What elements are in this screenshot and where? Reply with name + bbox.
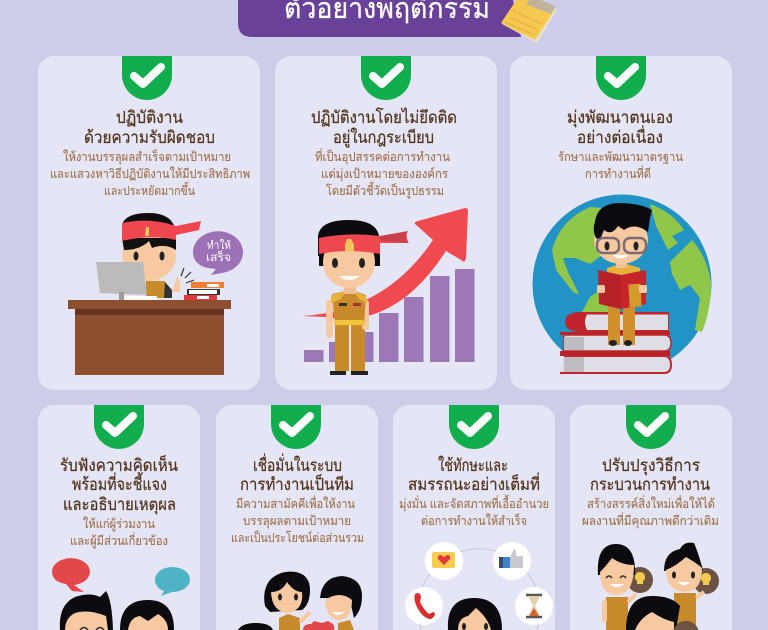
- heading: [60, 454, 178, 515]
- icon: check shield: [449, 405, 499, 449]
- text block: [582, 495, 719, 529]
- heading: สมรรถนะอย่างเต็มที่: [408, 472, 540, 494]
- arrow: [302, 208, 468, 319]
- illustration: globe: [532, 194, 712, 374]
- heading: [590, 456, 710, 494]
- icon: thumbs up: [493, 542, 531, 580]
- heading: [84, 108, 215, 147]
- heading: เชื่อมั่นในระบบ: [253, 453, 342, 475]
- heading: [408, 455, 540, 494]
- icon: check shield: [626, 405, 676, 449]
- icon: heart message: [425, 542, 463, 580]
- icon: phone: [405, 587, 443, 625]
- heading: มุ่งพัฒนาตนเอง: [567, 108, 673, 128]
- text block: โดยมีตัวชี้วัดเป็นรูปธรรม: [326, 181, 444, 199]
- text block: ที่เป็นอุปสรรคต่อการทำงาน: [315, 148, 450, 165]
- heading: รับฟังความคิดเห็น: [60, 454, 178, 475]
- speech bubble: [193, 231, 243, 275]
- text block: [399, 494, 549, 528]
- text block: และแสวงหาวิธีปฏิบัติงานให้มีประสิทธิภาพ: [50, 167, 250, 181]
- text block: มีความสามัคคีเพื่อให้งาน: [236, 495, 355, 511]
- heading: อยู่ในกฎระเบียบ: [333, 127, 434, 148]
- icon: hourglass: [515, 587, 553, 625]
- icon: bulb right: [693, 568, 719, 594]
- text block: รักษาและพัฒนามาตรฐาน: [558, 150, 683, 164]
- heading: ปรับปรุงวิธีการ: [602, 456, 700, 476]
- icon: check shield: [94, 405, 144, 449]
- heading: [240, 453, 354, 494]
- illustration: team with gear: [238, 572, 362, 630]
- heading: ใช้ทักษะและ: [438, 455, 508, 475]
- illustration: officer at desk: [68, 213, 231, 375]
- text block: การทำงานที่ดี: [585, 165, 651, 181]
- heading: การทำงานเป็นทีม: [240, 473, 354, 494]
- heading: [567, 108, 673, 147]
- text block: [231, 495, 364, 545]
- panel: skills: [393, 405, 555, 630]
- heading: ปฏิบัติงานโดยไม่ยึดติด: [311, 107, 457, 127]
- text block: [558, 150, 683, 181]
- illustration: smiling officer: [318, 220, 409, 375]
- panel: teamwork: [216, 405, 378, 630]
- text block: แต่มุ่งเป้าหมายขององค์กร: [321, 167, 448, 182]
- speech bubble: ทำให้: [207, 239, 231, 252]
- text block: [70, 517, 168, 549]
- panel: listening: [38, 405, 200, 630]
- text block: และผู้มีส่วนเกี่ยวข้อง: [70, 532, 168, 549]
- heading: อย่างต่อเนื่อง: [577, 125, 663, 147]
- heading: พร้อมที่จะชี้แจง: [72, 472, 167, 494]
- panel: self development: [510, 56, 732, 390]
- illustration: reading boy: [594, 203, 652, 346]
- bar chart: [304, 269, 474, 362]
- text block: [315, 148, 450, 199]
- heading: [311, 107, 457, 148]
- panel: process improvement: [570, 405, 732, 630]
- title banner: [238, 0, 521, 37]
- icon: check shield: [271, 405, 321, 449]
- text block: และประหยัดมากขึ้น: [104, 181, 195, 198]
- illustration: officers with ideas: [598, 543, 719, 630]
- heading: ปฏิบัติงาน: [116, 108, 183, 127]
- illustration: woman: [120, 600, 174, 630]
- text block: ต่อการทำงานให้สำเร็จ: [421, 513, 527, 528]
- icon: check shield: [122, 56, 172, 100]
- text block: มุ่งมั่น และจัดสภาพที่เอื้ออำนวย: [399, 494, 549, 512]
- panel: flexibility: [275, 56, 497, 390]
- text block: สร้างสรรค์สิ่งใหม่เพื่อให้ได้: [587, 495, 715, 511]
- text block: ให้งานบรรลุผลสำเร็จตามเป้าหมาย: [63, 149, 231, 165]
- heading: กระบวนการทำงาน: [590, 475, 710, 494]
- text block: [50, 149, 250, 198]
- icon: notepad: [501, 0, 557, 43]
- speech bubble: เสร็จ: [206, 250, 231, 264]
- illustration: icon ring: [405, 542, 553, 630]
- text block: บรรลุผลตามเป้าหมาย: [243, 514, 351, 529]
- speech bubble: red: [52, 558, 90, 592]
- icon: check shield: [596, 56, 646, 100]
- text block: ให้แก่ผู้ร่วมงาน: [83, 517, 155, 532]
- heading: ด้วยความรับผิดชอบ: [84, 128, 215, 147]
- icon: check shield: [361, 56, 411, 100]
- speech bubble: teal: [155, 567, 190, 596]
- text block: และเป็นประโยชน์ต่อส่วนรวม: [231, 530, 364, 545]
- icon: bulb left: [627, 567, 653, 593]
- illustration: man: [60, 591, 113, 630]
- illustration: stack of books: [560, 312, 671, 373]
- illustration: girl: [448, 598, 502, 630]
- text block: ผลงานที่มีคุณภาพดีกว่าเดิม: [582, 512, 719, 529]
- panel: responsibility: [38, 56, 260, 390]
- heading: และอธิบายเหตุผล: [63, 495, 176, 515]
